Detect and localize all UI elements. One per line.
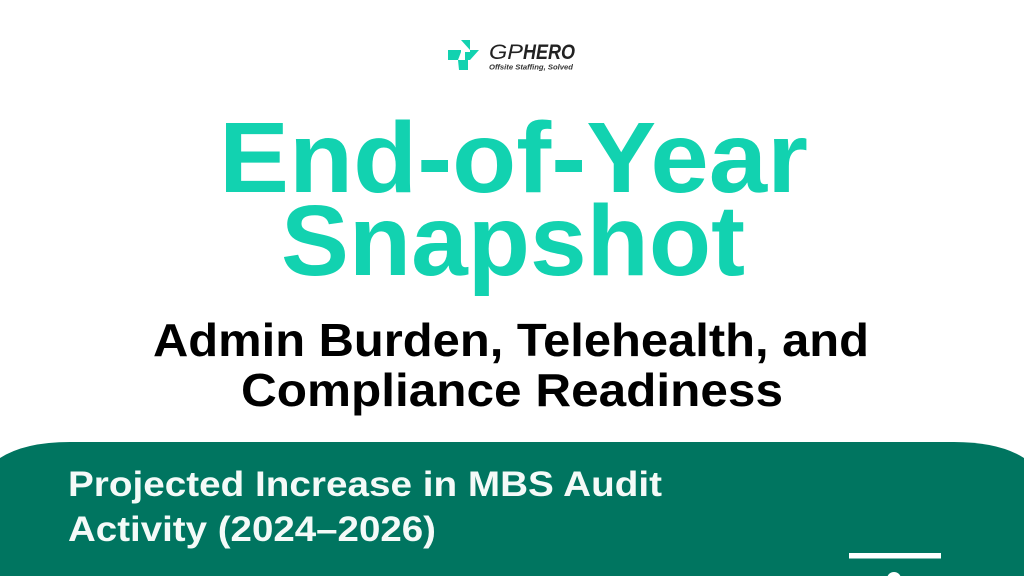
subtitle: Compliance Readiness	[241, 364, 783, 416]
panel heading: Projected Increase in MBS Audit	[68, 465, 662, 504]
panel heading: Activity (2024–2026)	[68, 510, 436, 549]
title	[219, 102, 808, 297]
logo wordmark: HERO	[523, 41, 575, 64]
panel: audit activity	[0, 442, 1024, 576]
logo wordmark	[489, 41, 575, 64]
icon: partially visible scale	[849, 553, 941, 576]
title: Snapshot	[281, 185, 745, 297]
icon: teal medical cross	[448, 40, 479, 70]
panel background	[0, 442, 1024, 576]
subtitle: Admin Burden, Telehealth, and	[153, 314, 869, 366]
title: End-of-Year	[219, 102, 808, 214]
panel heading	[68, 465, 662, 549]
logo tagline: Offsite Staffing, Solved	[489, 62, 573, 72]
logo: GPHero	[448, 40, 575, 72]
subtitle	[153, 314, 869, 416]
logo wordmark: GP	[489, 41, 523, 64]
